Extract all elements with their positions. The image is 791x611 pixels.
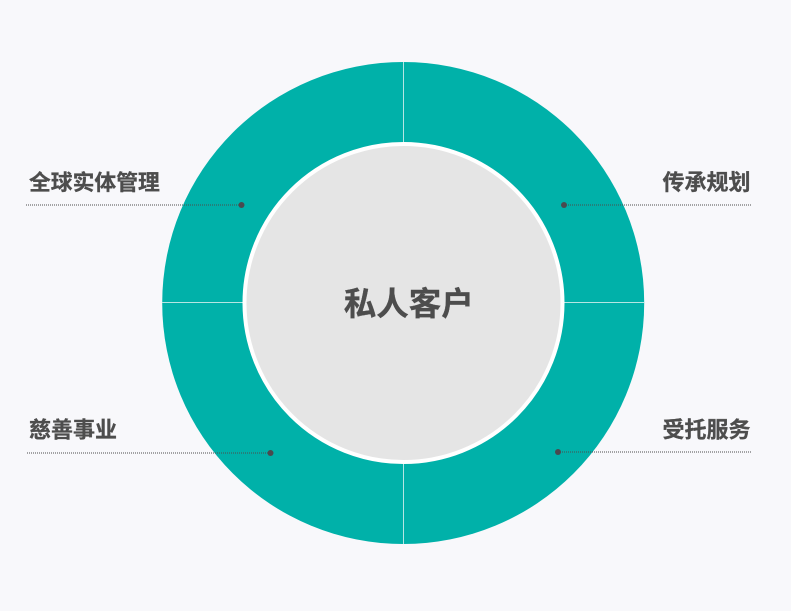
outer teal ring	[162, 62, 644, 544]
vertical ring dividers	[402, 62, 404, 544]
heading: 慈善事业	[29, 418, 117, 442]
leader line	[558, 451, 751, 453]
heading: 全球实体管理	[29, 170, 160, 195]
label: philanthropy	[27, 418, 274, 456]
label: succession planning	[561, 170, 751, 208]
label: fiduciary services	[555, 418, 751, 455]
leader line	[27, 452, 270, 454]
heading: 传承规划	[662, 170, 750, 195]
marker dot	[238, 202, 244, 208]
centre circle	[244, 144, 562, 462]
heading: 受托服务	[662, 418, 750, 442]
leader line	[26, 204, 241, 206]
label: global entity management	[26, 170, 244, 208]
centre title: 私人客户	[344, 286, 474, 322]
horizontal ring dividers	[162, 302, 644, 304]
leader line	[564, 204, 751, 206]
marker dot	[561, 202, 567, 208]
marker dot	[555, 449, 561, 455]
marker dot	[268, 450, 274, 456]
donut diagram	[162, 62, 644, 544]
